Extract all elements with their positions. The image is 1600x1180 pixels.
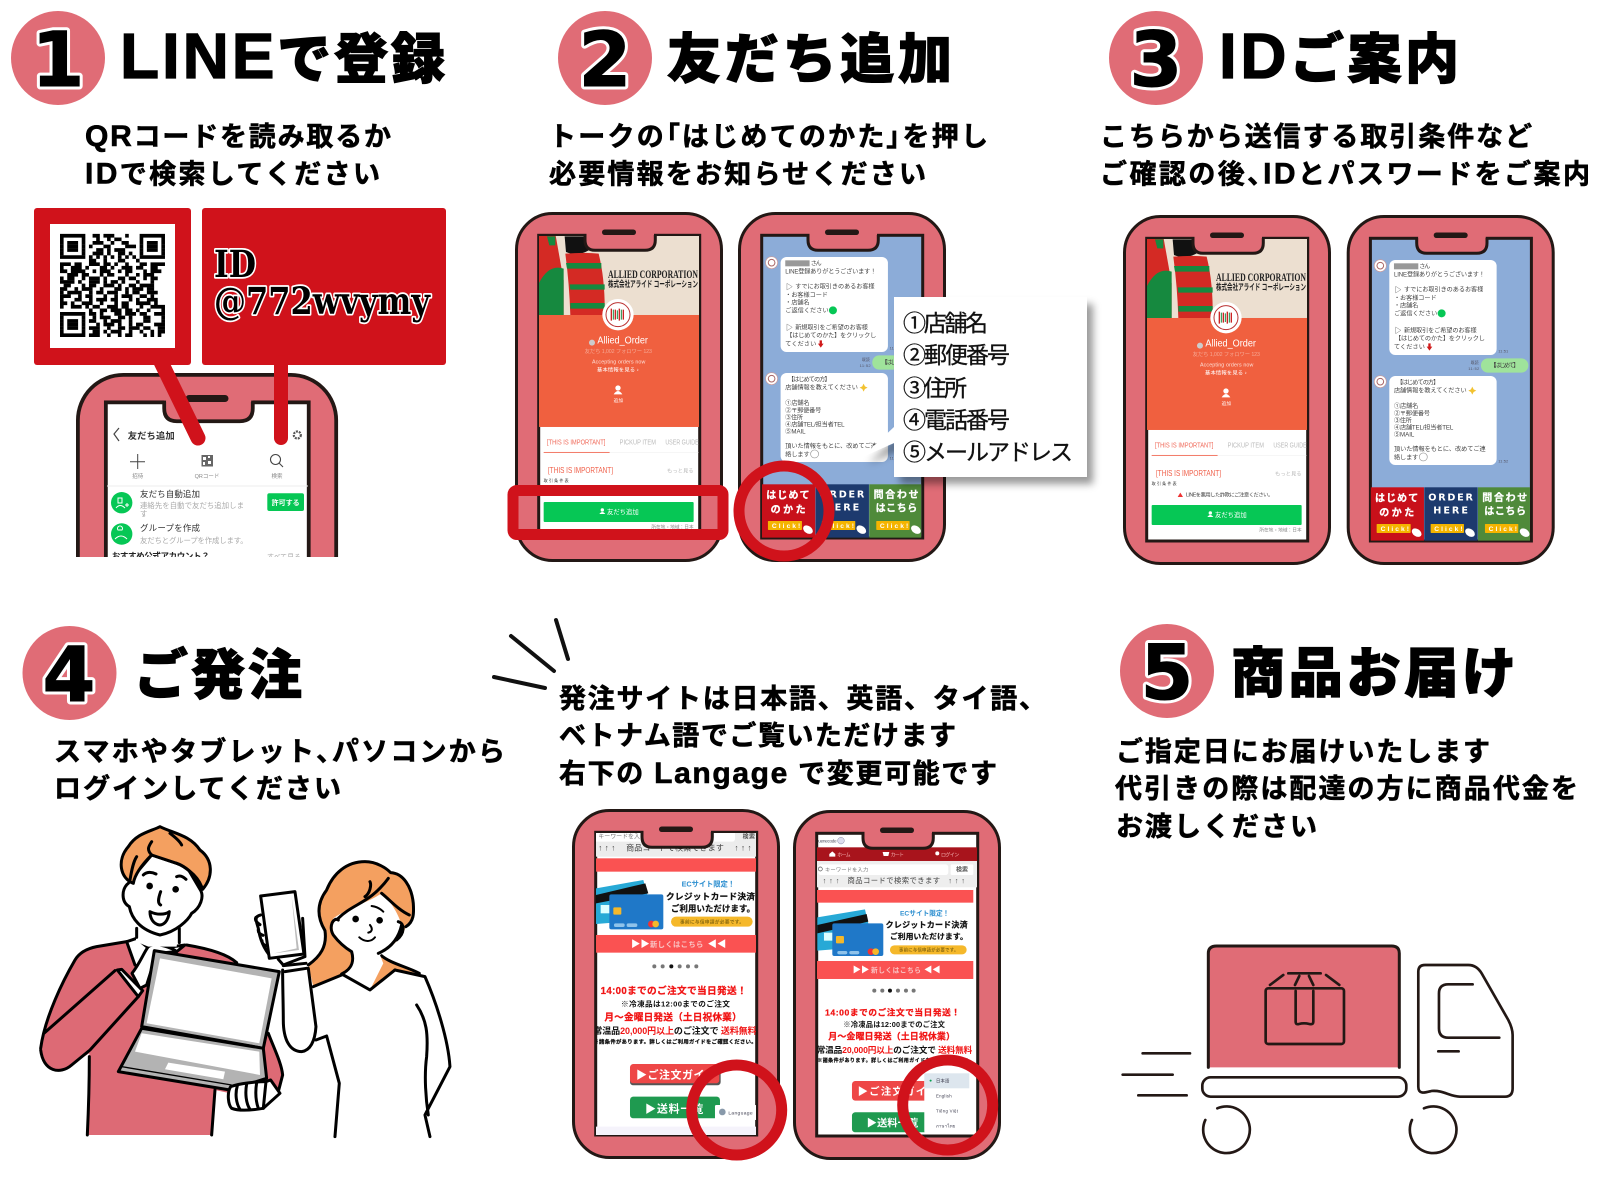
phone: step 3 LINE profile: 取引条件表 [1152,480,1177,486]
phone: order site, language menu open: ※諸条件があります。詳しくはご利用ガイドをご確認ください。 [817,1057,974,1064]
phone: LINE add-friend screen (cropped) [76,373,338,557]
phone: step 3 LINE chat: ⑤MAIL [1394,431,1415,439]
phone: LINE add-friend screen (cropped): グループを作成 [140,523,200,533]
phone: LINE add-friend screen (cropped): おすすめ公式アカウント？ [112,551,210,561]
phone: step 3 LINE profile: LINEを悪用した詐欺にご注意ください。 [1186,490,1273,498]
phone: step 2 LINE profile: Accepting orders now [592,360,645,366]
phone: step 2 LINE chat: ③住所 [785,413,803,421]
phone: order site, language menu open: ご利用いただけます。 [890,931,968,941]
phone: step 2 LINE chat: ・お客様コード [785,291,828,299]
phone: step 2 LINE chat: 11:52 [860,363,871,368]
phone: step 3 LINE chat: ORDER [1428,493,1474,504]
phone: order site, Language button: 14:00までのご注文で当日発送！ [601,985,747,997]
phone: step 3 LINE chat: 問合わせ [1482,491,1527,504]
phone: LINE add-friend screen (cropped): 検索 [271,472,283,480]
callout: required information: ⑤メールアドレス [903,439,1073,465]
step 4 heading: ご発注 [134,645,302,706]
highlight: first-time button circle [739,466,829,556]
phone: step 3 LINE profile: PICKUP ITEM [1228,441,1264,450]
language note text: 右下の Langage で変更可能です [559,757,997,790]
phone: order site, language menu open: キーワードを入力 [825,865,868,873]
phone: step 2 LINE chat: 絡します [785,450,810,458]
phone: step 2 LINE chat: LINE登録ありがとうございます！ [785,267,876,275]
phone: LINE add-friend screen (cropped): 友だち追加 [128,430,175,441]
phone: step 2 LINE profile: 株式会社アライド コーポレーション [608,278,698,289]
phone: step 3 LINE profile: もっと見る [1275,470,1302,477]
step 2 heading: 友だち追加 [667,30,952,90]
step 2 description [549,122,988,190]
step 5 number badge: 5 [1141,628,1193,717]
language note text: ベトナム語でご覧いただけます [559,720,956,751]
phone: step 2 LINE profile: [THIS IS IMPORTANT] [548,465,613,475]
phone: order site, language menu open: uenecode [818,838,837,843]
phone: step 2 LINE chat: Click! [826,523,854,530]
phone: step 3 LINE chat: 頂いた情報をもとに、改めてご連 [1394,445,1486,453]
phone: order site, Language button: ※冷凍品は12:00までのご注文 [621,999,730,1009]
phone: step 3 LINE chat: ・店舗名 [1394,301,1418,309]
step 4 description: ログインしてください [54,773,341,804]
step 5 number badge [1120,624,1214,718]
phone: step 2 LINE profile: 所在地・地域：日本 [651,523,694,530]
icon: delivery truck [1123,946,1513,1153]
phone: step 3 LINE chat: ご返信ください [1394,310,1437,318]
phone: step 3 LINE chat: ・お客様コード [1394,294,1437,302]
phone: step 3 LINE chat: 11:52 [1498,459,1509,464]
highlight: Language button circle [692,1065,782,1155]
step 2 number badge: 2 [579,15,631,104]
phone: step 3 LINE profile: 所在地・地域：日本 [1259,526,1302,533]
phone: order site, language menu open: ▶ご注文ガイド [858,1085,938,1098]
phone: step 3 LINE chat: 【はじめてのかた】をクリックし [1395,336,1485,343]
phone: LINE add-friend screen (cropped): 友だちとグループを作成します。 [140,536,248,545]
phone: step 3 LINE chat: 11:51 [1498,348,1509,353]
phone: step 3 LINE profile: Allied_Order [1205,339,1257,350]
phone: step 3 LINE chat: LINE登録ありがとうございます！ [1394,270,1485,278]
step 3 number badge [1109,11,1203,105]
phone: step 3 LINE chat [1348,216,1553,564]
phone: step 2 LINE profile: 友だち 1,002 フォロワー 123 [585,347,652,355]
phone: step 3 LINE profile: 友だち追加 [1215,510,1247,519]
phone: LINE add-friend screen (cropped): す。 [140,509,150,518]
phone: step 3 LINE chat: 既読 [1471,359,1479,365]
man's hand [228,1080,280,1110]
phone: order site, language menu open: 常温品20,000円以上のご注文で 送料無料 [817,1044,973,1055]
phone: step 2 LINE chat: てください [785,341,816,348]
phone: step 3 LINE profile: 株式会社アライド コーポレーション [1216,281,1306,292]
phone: step 3 LINE chat: 【はじめて】 [1490,362,1519,369]
step 2 description: 必要情報をお知らせください [549,160,926,190]
callout: required information: ②郵便番号 [903,342,1010,368]
phone: step 3 LINE chat: Click! [1434,526,1463,533]
step 1 description: IDで検索してください [85,158,380,190]
step 5 description: ご指定日にお届けいたします [1116,736,1490,767]
phone: step 2 LINE profile: PICKUP ITEM [620,438,656,447]
phone: order site, Language button: ※諸条件があります。詳しくはご利用ガイドをご確認ください。 [593,1038,757,1046]
phone: LINE add-friend screen (cropped): 連絡先を自動で友だち追加しま [140,501,244,510]
phone: LINE add-friend screen (cropped): QRコード [195,473,219,480]
phone: step 3 LINE chat: 店舗情報を教えてください [1394,387,1467,395]
phone: step 3 LINE profile: USER GUIDE [1273,441,1307,450]
phone: order site, Language button [574,810,778,1158]
step 1 number badge: 1 [32,15,84,104]
step 4 number badge: 4 [43,630,95,719]
language note text [559,684,1046,790]
phone: step 2 LINE chat: 問合わせ [874,488,919,501]
phone: step 2 LINE profile: ALLIED CORPORATION [608,267,698,281]
phone: order site, Language button: クレジットカード決済 [666,890,755,901]
phone: step 3 LINE profile: 友だち 1,002 フォロワー 123 [1193,350,1260,358]
ID callout [202,208,446,365]
phone: step 2 LINE profile: LINEを悪用した詐欺にご注意ください。 [578,487,665,495]
phone: order site, language menu open: ▶送料一覧 [867,1116,918,1129]
QR code [60,236,165,335]
phone: step 2 LINE chat: 頂いた情報をもとに、改めてご連 [785,442,877,450]
phone: step 2 LINE profile: 追加 [614,397,623,404]
phone: step 2 LINE chat: 11:52 [890,456,900,461]
phone: step 2 LINE profile: 取引条件表 [544,477,569,483]
phone: step 3 LINE chat: ②〒郵便番号 [1394,409,1430,417]
step 1 number badge [11,11,105,105]
step 1 number badge: 1 [32,15,84,104]
phone: step 3 LINE chat: はこちら [1484,505,1526,517]
step 4 description [54,736,505,804]
step 4 description: スマホやタブレット、パソコンから [54,736,505,767]
phone: step 2 LINE profile [516,214,722,560]
phone: order site, language menu open: クレジットカード決済 [886,919,968,929]
phone: step 3 LINE chat: 絡します [1394,453,1418,461]
phone: order site, language menu open [794,812,1000,1158]
phone: step 3 LINE chat: ④店舗TEL/担当者TEL [1394,424,1454,432]
step 3 heading: IDご案内 [1219,20,1459,92]
phone: step 2 LINE chat: ②〒郵便番号 [785,406,821,414]
phone: step 2 LINE chat: 11:51 [890,345,900,350]
phone: step 2 LINE profile: 友だち追加 [607,507,639,516]
phone: order site, language menu open: ◀◀ [924,965,941,975]
phone: step 3 LINE chat: はじめて [1375,493,1418,505]
phone: LINE add-friend screen (cropped): 招待 [132,472,144,480]
phone: order site, Language button: ◀◀ [708,939,726,949]
step 2 number badge [558,11,652,105]
phone: step 3 LINE profile [1124,216,1330,564]
highlight: add-friend button frame [513,490,723,534]
phone: step 3 LINE profile: 基本情報を見る › [1205,368,1247,376]
ID callout: ID [214,242,256,286]
phone: LINE add-friend screen (cropped): 友だち自動追加 [140,489,200,499]
phone: step 2 LINE chat: 【はじめての方】 [788,376,831,384]
phone: step 2 LINE chat: 新規取引をご希望のお客様 [795,323,868,331]
phone: step 2 LINE chat: ご返信ください [785,307,829,315]
phone: order site, Language button: ご利用いただけます。 [671,904,755,914]
step 3 description: ご確認の後、IDとパスワードをご案内 [1100,158,1590,190]
phone: step 2 LINE chat: 既読 [862,356,870,362]
step 4 number badge: 4 [43,630,95,719]
step 3 number badge: 3 [1130,15,1182,104]
phone: step 3 LINE profile: [THIS IS IMPORTANT] [1156,468,1221,478]
step 5 description [1115,736,1578,842]
phone: order site, Language button: ▶▶ [631,939,650,949]
phone: step 2 LINE chat [740,214,944,560]
phone: step 2 LINE chat: すでにお取引きのあるお客様 [795,283,875,291]
phone: step 2 LINE chat: ①店舗名 [785,399,810,407]
phone: step 2 LINE chat: Click! [880,523,908,530]
laptop [118,951,279,1090]
step 1 description: QRコードを読み取るか [85,120,391,153]
phone: step 3 LINE chat: すでにお取引きのあるお客様 [1404,286,1483,294]
phone: step 2 LINE chat: ⑤MAIL [785,428,806,436]
callout: required information: ③住所 [903,375,967,401]
step 3 description [1100,122,1590,190]
phone: step 3 LINE chat: 【はじめての方】 [1397,379,1439,387]
phone: step 3 LINE chat: ③住所 [1394,416,1412,424]
phone: order site, Language button: ECサイト限定！ [682,879,735,888]
phone: order site, language menu open: 日本語 [936,1077,950,1084]
phone: order site, language menu open: ECサイト限定！ [900,909,949,917]
step 1 heading: LINEで登録 [120,20,445,92]
phone: step 3 LINE chat: Click! [1381,526,1409,533]
phone: order site, language menu open: 検索 [956,866,968,874]
phone: step 2 LINE chat: ④店舗TEL/担当者TEL [785,421,845,429]
phone: step 3 LINE chat: 新規取引をご希望のお客様 [1404,326,1477,334]
phone: order site, language menu open: ログイン [941,852,959,859]
phone: order site, Language button: 検索 [743,833,755,841]
phone: order site, language menu open: ▶▶ [853,965,869,975]
phone: order site, language menu open: ภาษาไทย [936,1124,956,1129]
step 5 description: お渡しください [1116,812,1317,842]
phone: step 2 LINE chat: さん [811,260,822,267]
connector from ID callout [274,362,288,438]
phone: step 2 LINE chat: はじめて [766,490,810,502]
phone: step 2 LINE chat: 【はじめてのかた】をクリックし [786,333,876,340]
phone: order site, Language button: 月～金曜日発送（土日祝休業） [604,1011,742,1023]
phone: order site, language menu open: 14:00までのご注文で当日発送！ [825,1007,960,1018]
phone: LINE add-friend screen (cropped): すべて見る [267,553,301,561]
step 4 number badge [22,626,116,720]
phone: order site, Language button: 常温品20,000円以上のご注文で 送料無料 [593,1025,757,1036]
step 2 description: トークの「はじめてのかた」を押し [549,122,988,152]
callout: required information: ④電話番号 [903,407,1010,433]
phone: step 2 LINE chat: Click! [772,523,800,530]
step 1 description [85,120,391,190]
phone: order site, language menu open: ホーム [837,853,851,859]
phone: step 3 LINE chat: ①店舗名 [1394,402,1418,410]
phone: step 3 LINE chat: 11:52 [1468,366,1480,371]
ID callout: @772wvymy [214,279,431,323]
emphasis burst lines [494,620,568,688]
phone: step 3 LINE profile: ALLIED CORPORATION [1216,270,1306,284]
phone: step 2 LINE chat: のかた [771,504,806,516]
step 5 description: 代引きの際は配達の方に商品代金を [1115,774,1578,804]
phone: order site, Language button: 事前に与信申請が必要です。 [680,919,744,926]
phone: step 3 LINE chat: さん [1419,263,1430,270]
woman [255,862,450,1137]
QR code callout [34,208,191,365]
language note text: 発注サイトは日本語、英語、タイ語、 [559,684,1046,714]
phone: step 3 LINE chat: のかた [1379,507,1414,519]
step 2 number badge: 2 [579,15,631,104]
phone: step 3 LINE profile: [THIS IS IMPORTANT] [1155,441,1213,450]
phone: step 2 LINE chat: ・店舗名 [785,298,810,306]
phone: order site, language menu open: ↑ ↑ ↑ 商品コードで検索できます ↑ ↑ ↑ [823,876,965,885]
step 3 description: こちらから送信する取引条件など [1100,122,1532,152]
phone: order site, language menu open: カート [891,853,904,859]
callout: required information: ①店舗名 [903,310,988,336]
phone: step 2 LINE chat: はこちら [876,502,917,514]
illustration: man with laptop and woman with smartphone [40,827,450,1137]
phone: step 3 LINE profile: 追加 [1222,400,1231,407]
phone: LINE add-friend screen (cropped): 許可する [272,498,300,507]
phone: order site, Language button: ▶送料一覧 [645,1101,703,1115]
phone: order site, language menu open: 新しくはこちら [871,966,921,975]
step 3 number badge: 3 [1130,15,1182,104]
phone: step 2 LINE chat: 店舗情報を教えてください [785,384,858,392]
phone: order site, language menu open: English [936,1093,952,1098]
phone: step 2 LINE profile: もっと見る [667,467,694,474]
phone: order site, language menu open: 事前に与信申請が必要です。 [899,947,958,954]
connector from QR callout [161,362,198,438]
phone: order site, Language button: キーワードを入 [598,834,640,841]
phone: order site, Language button: ↑ ↑ ↑ 商品コードで検索できます ↑ ↑ ↑ [598,843,752,853]
phone: order site, Language button: ▶ご注文ガイド [636,1068,716,1082]
phone: order site, language menu open: 月～金曜日発送（土日祝休業） [828,1031,955,1042]
callout: required information [862,297,1087,477]
phone: step 2 LINE profile: [THIS IS IMPORTANT] [547,438,605,447]
step 5 number badge: 5 [1141,628,1193,717]
phone: step 3 LINE chat: Click! [1489,526,1517,533]
phone: step 2 LINE profile: USER GUIDE [665,438,699,447]
phone: step 3 LINE chat: てください [1394,344,1425,351]
phone: step 3 LINE chat: HERE [1433,505,1468,516]
phone: step 3 LINE profile: Accepting orders now [1200,363,1253,369]
highlight: language menu circle [903,1060,993,1150]
phone: step 2 LINE chat: ORDER [820,490,865,501]
phone: step 2 LINE chat: HERE [825,502,859,513]
phone: step 2 LINE profile: Allied_Order [597,336,649,347]
phone: step 2 LINE profile: 基本情報を見る › [597,365,639,373]
phone: order site, language menu open: ※冷凍品は12:00までのご注文 [843,1020,946,1029]
step 5 heading: 商品お届け [1231,644,1516,704]
phone: order site, language menu open: Tiếng Việt [936,1108,959,1113]
phone: order site, Language button: Language [728,1110,753,1116]
phone: step 2 LINE chat: 【はじめて】 [881,359,911,366]
man [40,827,283,1135]
phone: order site, Language button: 新しくはこちら [650,940,703,949]
